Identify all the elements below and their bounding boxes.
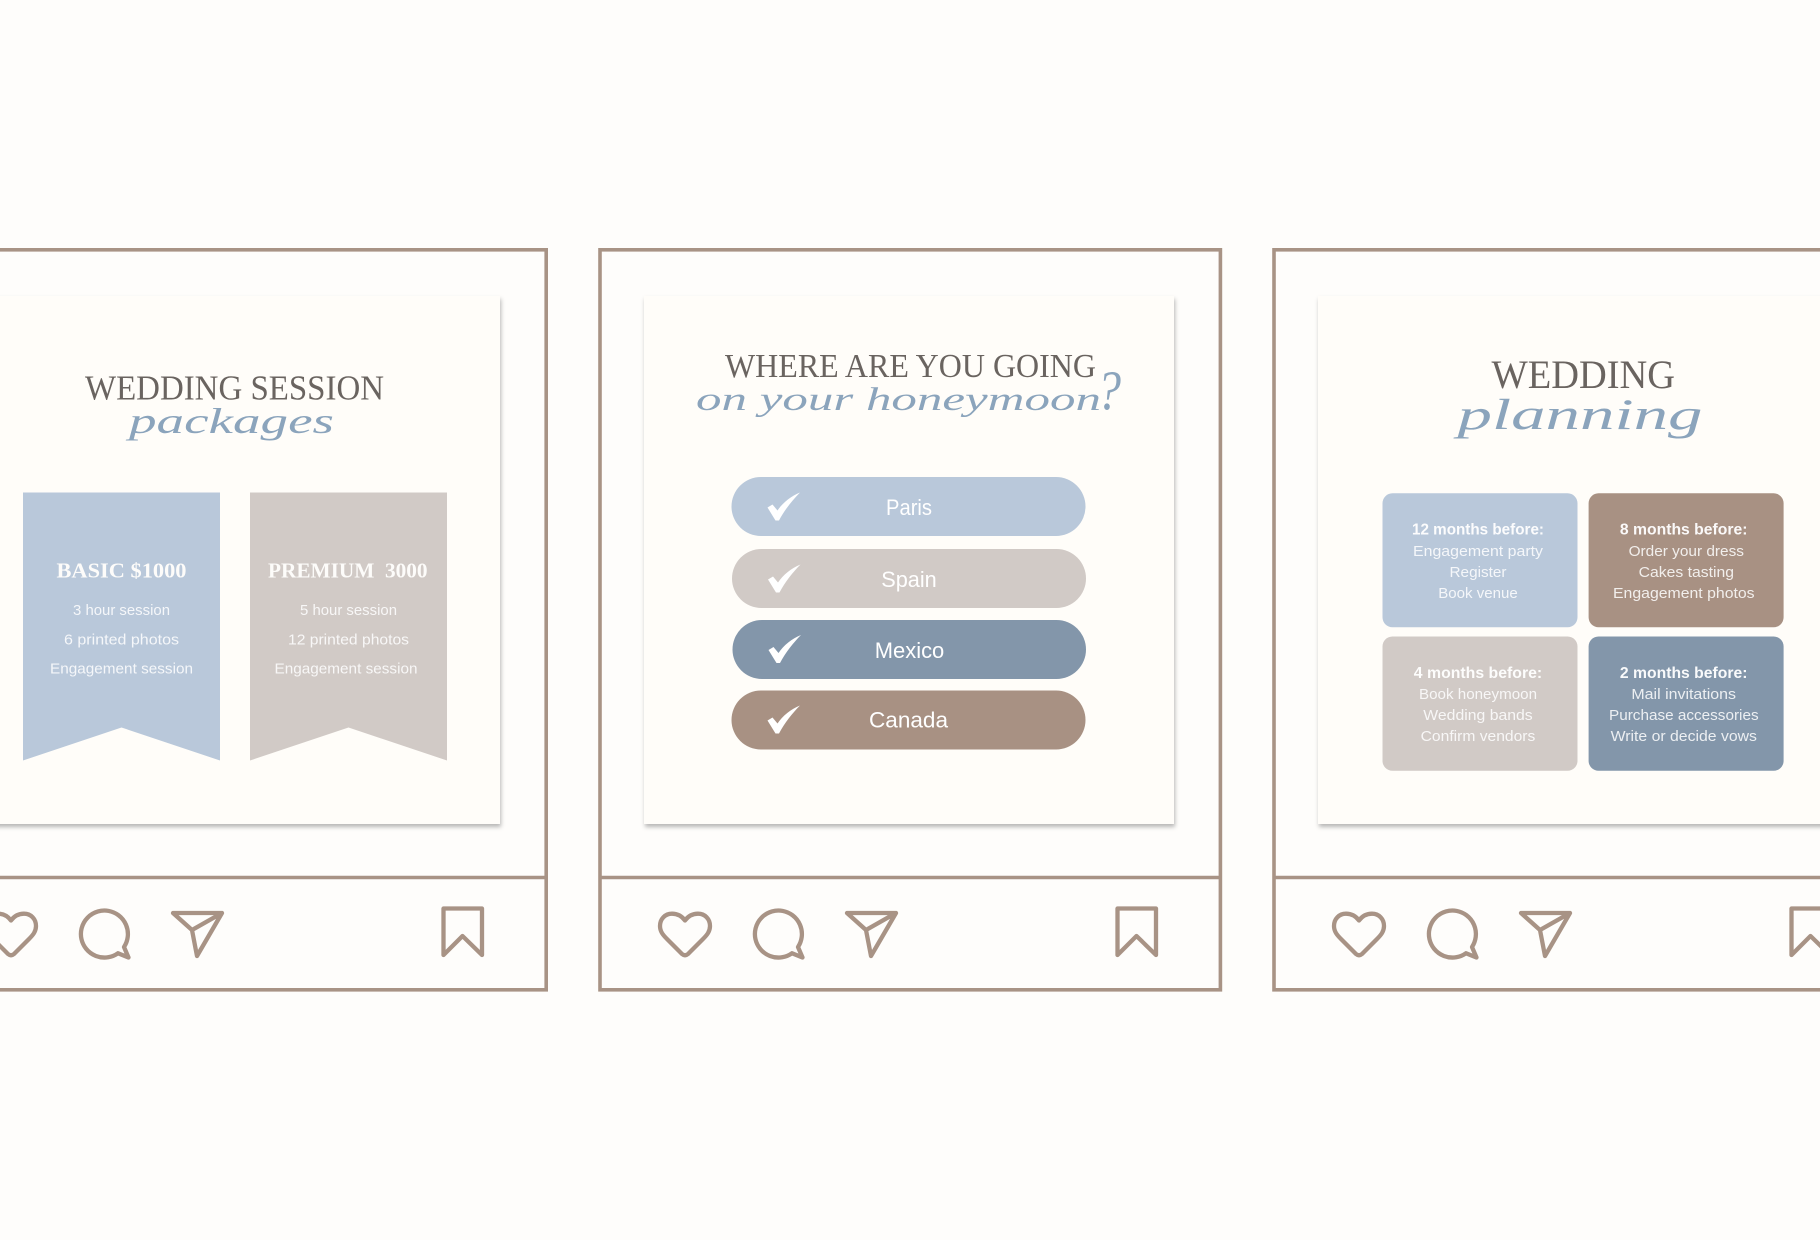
- card: 2 months before: Write or decide vows: [1611, 728, 1757, 745]
- heading: where are you going on your honeymoon: [696, 348, 1121, 422]
- pill: Canada: [732, 690, 1086, 750]
- panel: honeymoon destinations post: [600, 250, 1220, 990]
- ribbon: basic package: 3 hour session: [73, 602, 170, 619]
- card: 2 months before: Purchase accessories: [1609, 707, 1759, 724]
- card: 8 months before: 8 months before:: [1620, 522, 1747, 539]
- card: 8 months before: Engagement photos: [1613, 585, 1755, 602]
- ribbon: basic package: BASIC $1000: [56, 558, 186, 582]
- card: 8 months before: Cakes tasting: [1639, 564, 1734, 581]
- card: 4 months before: [1382, 636, 1578, 771]
- heading: wedding session packages: packages: [124, 401, 334, 441]
- card: 12 months before: Register: [1450, 564, 1506, 581]
- ribbon: basic package: Engagement session: [50, 660, 193, 678]
- heading: wedding planning: WEDDING: [1492, 352, 1675, 397]
- card: 4 months before: Confirm vendors: [1421, 728, 1535, 745]
- action icons: [0, 908, 482, 958]
- post frame: [1274, 250, 1820, 990]
- post image card: [0, 296, 500, 824]
- card: 2 months before: [1589, 636, 1784, 771]
- ribbon: basic package: [23, 492, 220, 760]
- heading: wedding planning: [1453, 352, 1702, 439]
- pill: Canada: Canada: [869, 708, 949, 732]
- pill: Mexico: Mexico: [875, 638, 944, 663]
- pill: Paris: [732, 477, 1086, 536]
- post frame: [0, 250, 546, 990]
- heading: where are you going on your honeymoon: ?: [1097, 360, 1121, 422]
- card: 4 months before: Book honeymoon: [1419, 686, 1537, 703]
- heading: where are you going on your honeymoon: on your honeymoon: [696, 382, 1101, 418]
- pill: Mexico: [732, 620, 1086, 679]
- ribbon: premium package: PREMIUM 3000: [268, 558, 428, 582]
- ribbon: premium package: [250, 492, 447, 760]
- post frame: [600, 250, 1220, 990]
- ribbon: premium package: 12 printed photos: [288, 632, 409, 648]
- card: 12 months before: Book venue: [1438, 585, 1518, 602]
- card: 12 months before: 12 months before:: [1412, 522, 1544, 539]
- panel: wedding planning post: [1274, 250, 1820, 990]
- ribbon: premium package: 5 hour session: [300, 602, 397, 619]
- card: 8 months before: Order your dress: [1629, 543, 1744, 560]
- ribbon: premium package: Engagement session: [274, 660, 418, 678]
- heading: wedding planning: planning: [1453, 392, 1702, 439]
- card: 4 months before: Wedding bands: [1423, 707, 1533, 724]
- heading: wedding session packages: WEDDING SESSION: [85, 368, 384, 408]
- card: 2 months before: 2 months before:: [1620, 665, 1747, 682]
- post image card: [644, 296, 1174, 824]
- pill: Paris: Paris: [886, 495, 932, 520]
- card: 12 months before: Engagement party: [1413, 543, 1544, 560]
- heading: where are you going on your honeymoon: WHERE ARE YOU GOING: [725, 348, 1096, 385]
- action icons: [1334, 908, 1820, 958]
- pill: Spain: Spain: [881, 567, 937, 592]
- heading: wedding session packages: [85, 368, 384, 441]
- card: 4 months before: 4 months before:: [1414, 665, 1542, 682]
- card: 12 months before: [1382, 493, 1578, 627]
- action icons: [660, 908, 1156, 958]
- ribbon: basic package: 6 printed photos: [64, 632, 179, 648]
- card: 8 months before: [1589, 493, 1784, 627]
- pill: Spain: [732, 549, 1086, 608]
- panel: wedding session packages post: [0, 250, 546, 990]
- post image card: [1318, 296, 1820, 824]
- card: 2 months before: Mail invitations: [1631, 686, 1736, 703]
